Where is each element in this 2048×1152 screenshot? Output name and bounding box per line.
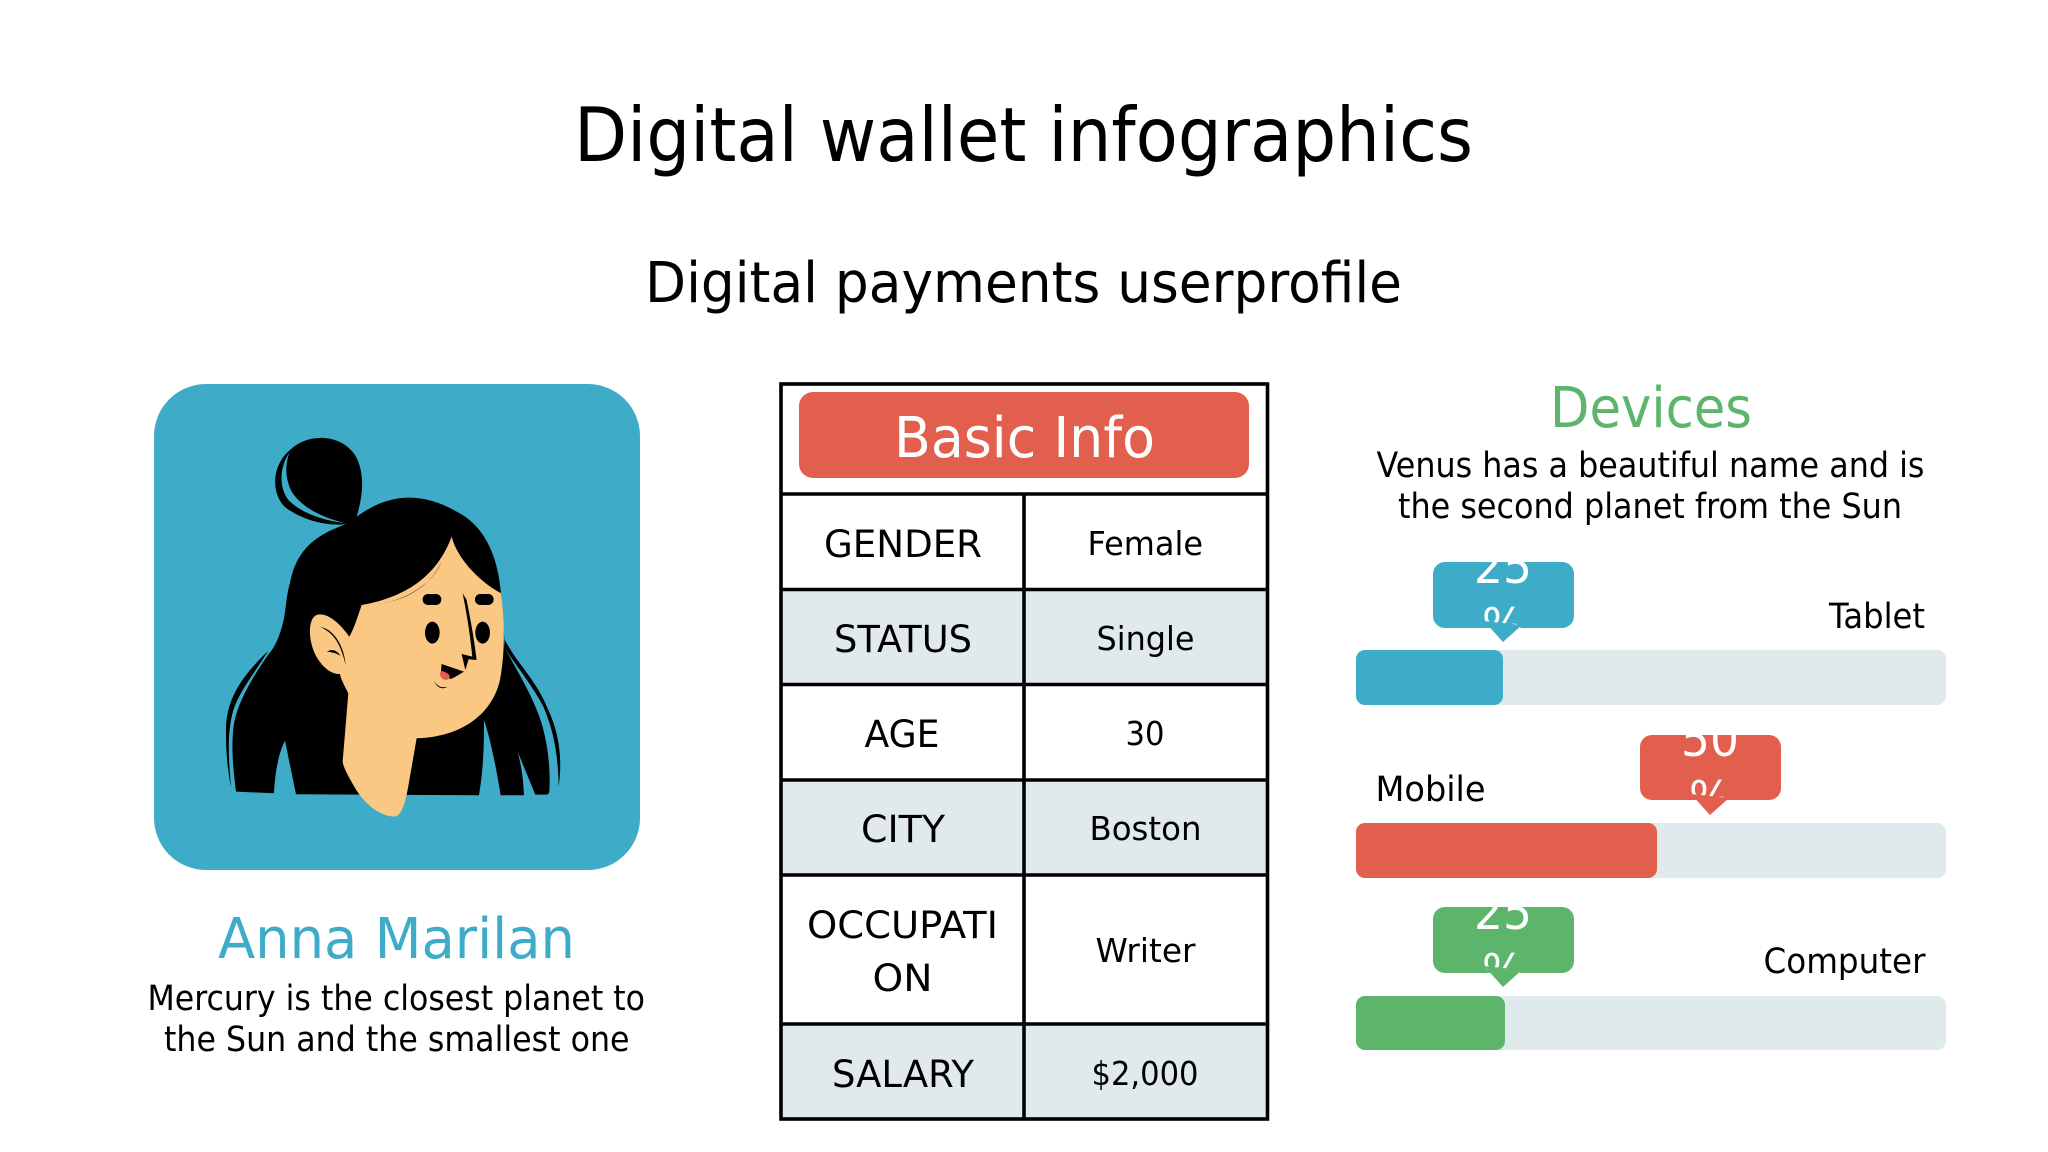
subtitle: Digital payments userprofile: [645, 251, 1402, 316]
row: gender: GENDER: [824, 522, 982, 566]
table header: [799, 392, 1249, 478]
panel: basic info table: [781, 384, 1268, 1119]
row: occupation: OCCUPATI: [807, 903, 998, 947]
name: Anna Marilan: [218, 907, 575, 972]
row: salary: [832, 1052, 1198, 1096]
row: age: 30: [1126, 714, 1164, 753]
panel: user avatar: [148, 384, 645, 1060]
description: [148, 979, 645, 1060]
bar: tablet: [1356, 562, 1946, 705]
devices heading: Devices: [1550, 376, 1752, 441]
bar: mobile: 50: [1681, 713, 1739, 768]
description: Mercury is the closest planet to: [148, 979, 645, 1019]
row: occupation: Writer: [1096, 931, 1196, 970]
bar: tablet: %: [1482, 599, 1524, 654]
row: status: STATUS: [834, 617, 972, 661]
alternating row fills: [781, 589, 1267, 1119]
bar: computer: %: [1482, 945, 1524, 1000]
icon: woman portrait: [226, 438, 560, 817]
row: occupation: ON: [872, 956, 932, 1000]
row: salary: $2,000: [1092, 1054, 1198, 1093]
bar: mobile: Mobile: [1376, 770, 1486, 810]
row: status: [834, 617, 1194, 661]
devices description: [1376, 446, 1924, 527]
panel: devices: [1356, 376, 1946, 1050]
row: city: Boston: [1090, 809, 1202, 848]
devices description: Venus has a beautiful name and is: [1376, 446, 1924, 486]
avatar background: [154, 384, 640, 870]
row: age: [864, 712, 1164, 756]
row: status: Single: [1096, 619, 1194, 658]
bar: mobile: %: [1689, 772, 1731, 827]
row: city: CITY: [861, 807, 945, 851]
row: occupation: [807, 903, 1196, 1000]
row: salary: SALARY: [832, 1052, 974, 1096]
bar: mobile: [1356, 735, 1946, 878]
row: city: [861, 807, 1202, 851]
table header: Basic Info: [894, 406, 1155, 471]
bar: computer: [1356, 907, 1946, 1050]
devices description: the second planet from the Sun: [1398, 487, 1902, 527]
title: Digital wallet infographics: [574, 91, 1473, 179]
row: age: AGE: [864, 712, 940, 756]
bar: tablet: 25: [1474, 540, 1532, 595]
description: the Sun and the smallest one: [164, 1020, 630, 1060]
row: gender: Female: [1088, 524, 1203, 563]
bar: computer: Computer: [1764, 942, 1926, 982]
table grid: [781, 384, 1268, 1119]
row: gender: [824, 522, 1203, 566]
bar: computer: 25: [1474, 886, 1532, 941]
bar: tablet: Tablet: [1828, 597, 1925, 637]
